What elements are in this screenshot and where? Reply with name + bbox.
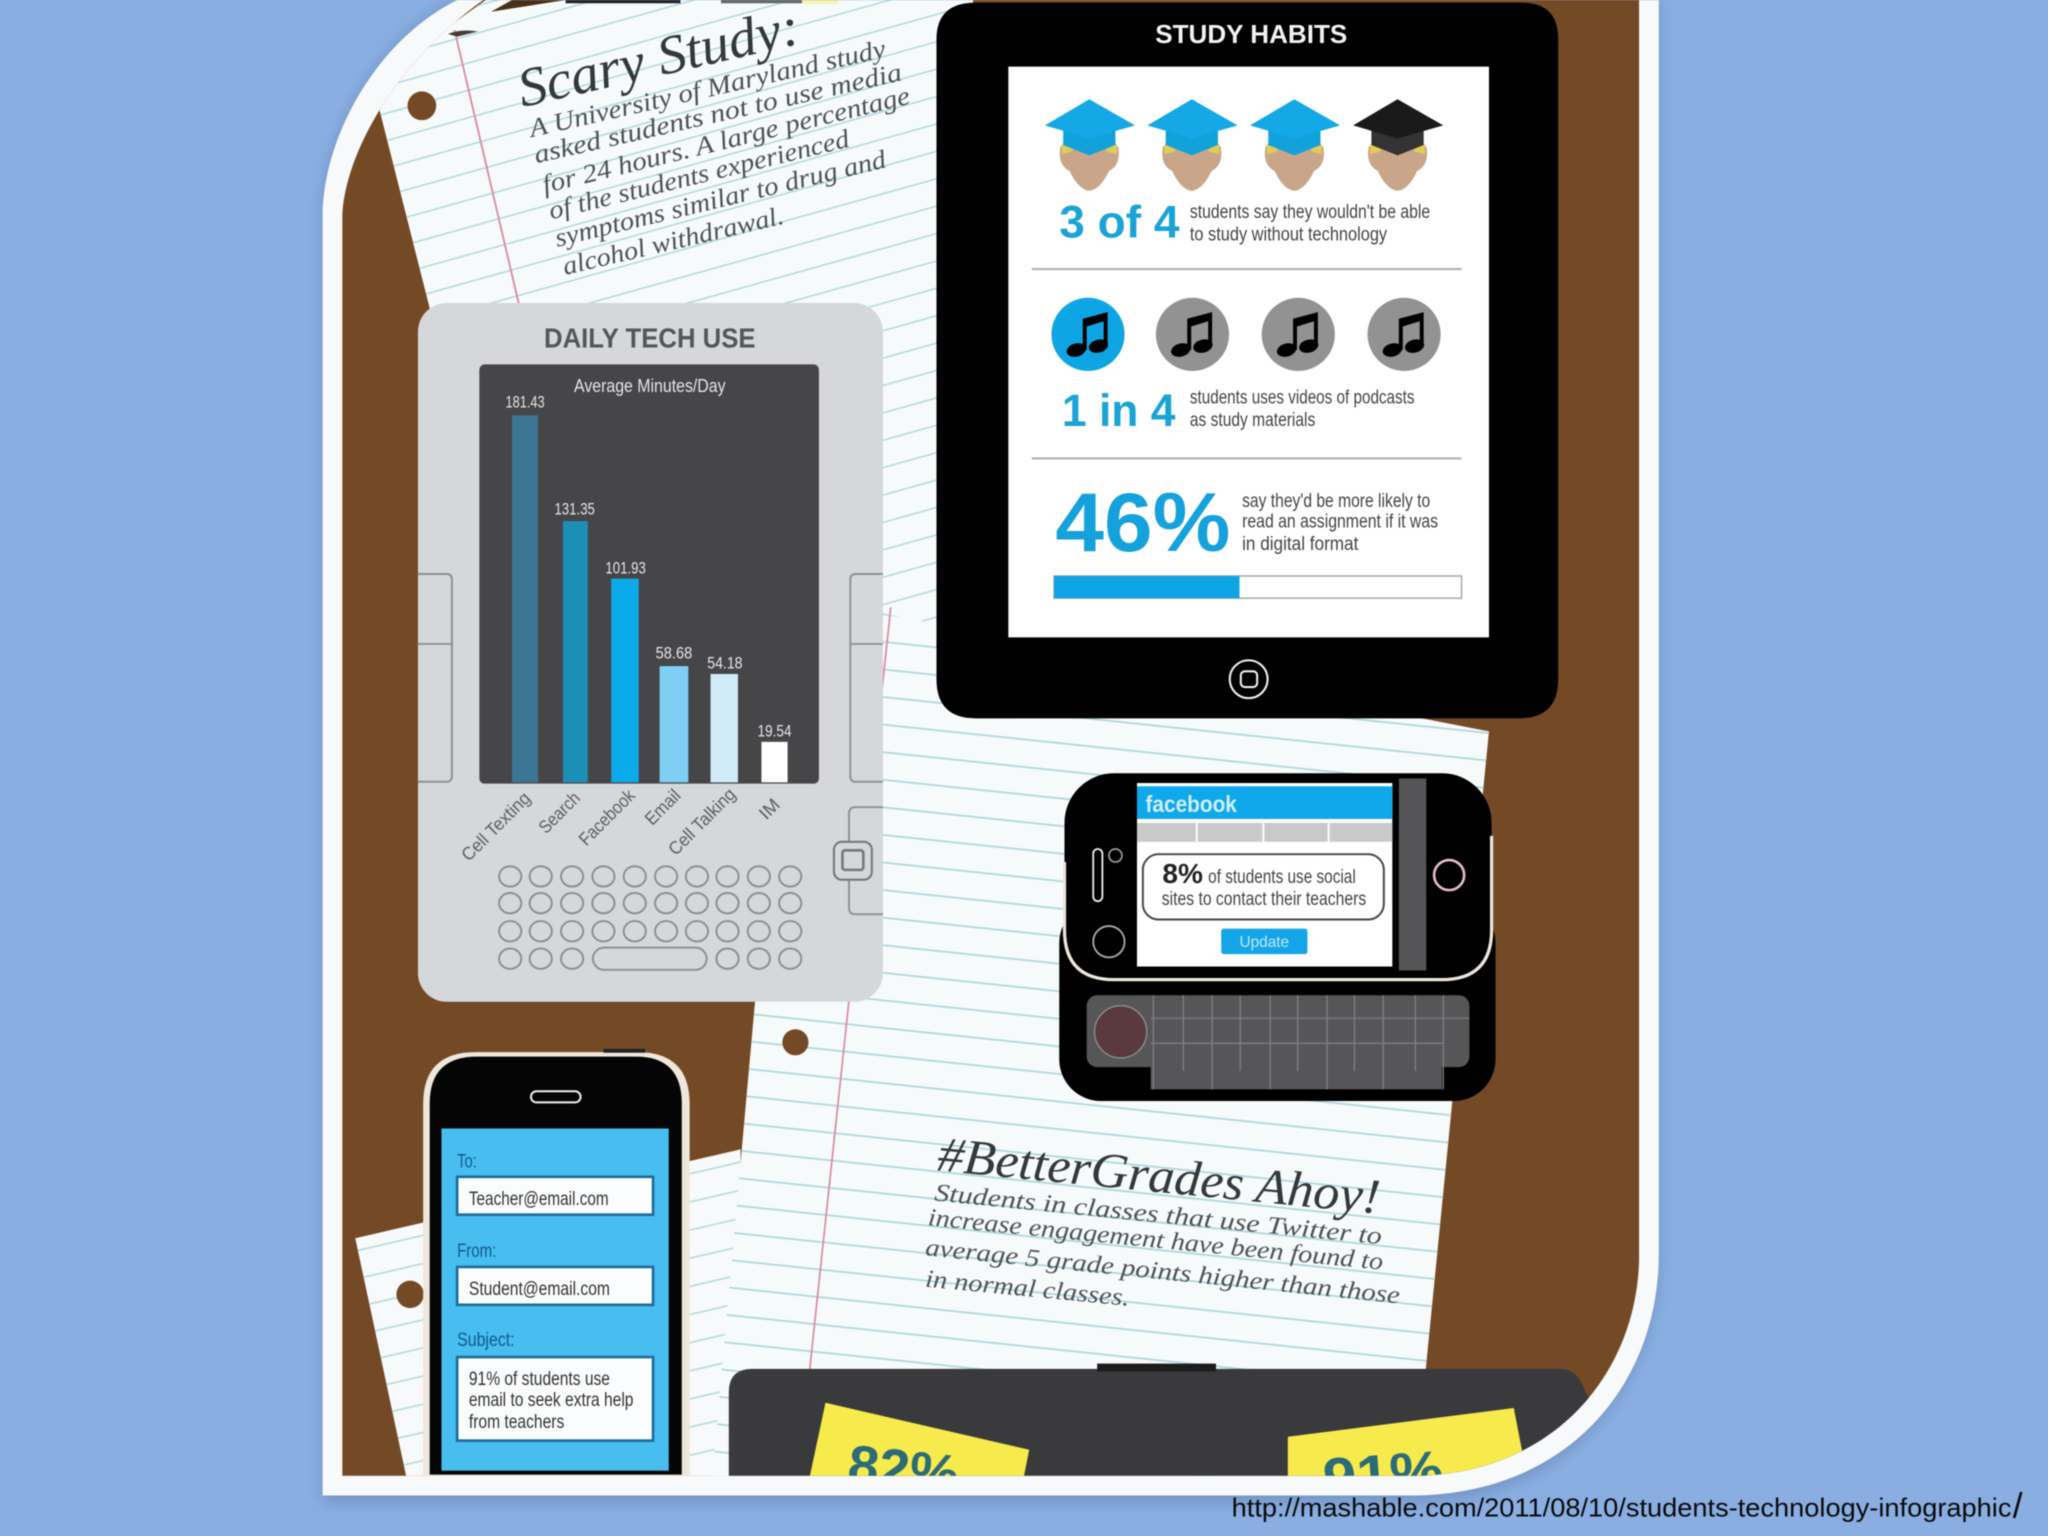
bars bbox=[512, 415, 788, 782]
category labels: IM bbox=[754, 794, 784, 823]
stat: 3 of 4: 3 of 4 bbox=[1059, 197, 1180, 248]
note text: average 5 grade points higher than those bbox=[924, 1234, 1401, 1309]
note text: A University of Maryland study bbox=[524, 34, 889, 143]
panel: bottom dark tablet bbox=[728, 1362, 1590, 1477]
paper hole bbox=[396, 1281, 424, 1308]
bar values: 19.54 bbox=[758, 723, 792, 741]
bar values: 101.93 bbox=[605, 559, 646, 577]
note text: of the students experienced bbox=[546, 124, 853, 225]
keyboard bbox=[499, 866, 801, 970]
heading: daily tech use: DAILY TECH USE bbox=[544, 322, 756, 353]
note text: asked students not to use media bbox=[531, 57, 904, 169]
tablet top button bbox=[1097, 1364, 1216, 1371]
note text bbox=[524, 34, 913, 281]
sticky note: 82% bbox=[809, 1402, 1030, 1476]
category labels: Cell Talking bbox=[664, 783, 739, 859]
stat: 3 of 4: to study without technology bbox=[1190, 224, 1388, 245]
category labels: Facebook bbox=[574, 784, 639, 849]
facebook tabs bbox=[1137, 823, 1392, 842]
icon: music note gray 1 bbox=[1156, 298, 1229, 371]
source url: http://mashable.com/2011/08/10/students-technology-infographic bbox=[1232, 1492, 2011, 1522]
tablet screen bbox=[1008, 67, 1489, 637]
bar values: 58.68 bbox=[656, 644, 692, 662]
field: subject: email to seek extra help bbox=[469, 1389, 634, 1411]
speech bubble: 8%: sites to contact their teachers bbox=[1162, 889, 1366, 910]
bar values: 181.43 bbox=[505, 394, 545, 412]
icon: graduate blue 3 bbox=[1250, 99, 1340, 191]
margin line bbox=[455, 30, 520, 308]
icon: graduate black bbox=[1353, 99, 1443, 191]
phone base bbox=[1059, 901, 1496, 1101]
heading: study habits: STUDY HABITS bbox=[1155, 19, 1347, 49]
field: subject: from teachers bbox=[469, 1411, 564, 1433]
category labels: Search bbox=[534, 787, 584, 837]
stat: 3 of 4: students say they wouldn't be able bbox=[1190, 202, 1430, 223]
speaker and camera bbox=[1093, 849, 1464, 957]
stat: 46%: in digital format bbox=[1242, 534, 1359, 555]
paper hole bbox=[408, 91, 436, 120]
speaker bbox=[531, 1091, 581, 1102]
field: from bbox=[457, 1240, 653, 1305]
field: from: From: bbox=[457, 1240, 496, 1262]
update button: Update bbox=[1240, 934, 1289, 951]
icon: music note blue bbox=[1051, 298, 1125, 371]
source url: / bbox=[2013, 1487, 2023, 1526]
panel: email phone bbox=[423, 1049, 690, 1482]
panel: study habits tablet bbox=[936, 3, 1558, 718]
category labels bbox=[457, 783, 784, 865]
note text: Students in classes that use Twitter to bbox=[933, 1179, 1383, 1250]
paper hole bbox=[782, 1029, 808, 1055]
phone screen bbox=[1137, 783, 1392, 967]
category labels: Cell Texting bbox=[457, 787, 534, 865]
panel: facebook slider phone bbox=[1059, 773, 1496, 1101]
update button bbox=[1221, 929, 1307, 954]
speech bubble: 8%: of students use social bbox=[1208, 867, 1356, 888]
top edge scraps of cropped devices bbox=[448, 0, 839, 37]
stat: 1 in 4: students uses videos of podcasts bbox=[1190, 388, 1415, 409]
bar values bbox=[505, 394, 792, 741]
white rounded frame bbox=[323, 0, 1659, 1496]
note text: for 24 hours. A large percentage bbox=[539, 81, 913, 199]
phone body bbox=[1064, 773, 1492, 980]
sticky note: 91% bbox=[1287, 1407, 1523, 1476]
stat: 1 in 4: as study materials bbox=[1190, 410, 1315, 431]
phone body outline bbox=[1064, 836, 1492, 980]
field: to bbox=[457, 1151, 653, 1215]
paper: better grades bbox=[712, 596, 1489, 1482]
stat: 3 of 4 bbox=[1059, 197, 1430, 248]
stat: 46%: say they'd be more likely to bbox=[1242, 491, 1430, 512]
icon: graduate blue 2 bbox=[1147, 99, 1238, 191]
field: from: Student@email.com bbox=[469, 1278, 610, 1300]
side buttons bbox=[418, 574, 883, 914]
speech bubble: 8% bbox=[1143, 854, 1384, 920]
phone top button bbox=[603, 1049, 645, 1053]
sticky note: 91%: 91% bbox=[1321, 1439, 1445, 1509]
sticky note: 82%: 82% bbox=[845, 1433, 962, 1506]
icon row: graduate heads bbox=[1045, 99, 1443, 191]
home button bbox=[834, 842, 872, 880]
icon row: music notes bbox=[1051, 298, 1441, 371]
stat: 1 in 4 bbox=[1062, 385, 1415, 436]
stat: 1 in 4: 1 in 4 bbox=[1062, 385, 1176, 436]
field: subject: 91% of students use bbox=[469, 1368, 610, 1390]
brown corkboard bbox=[333, 0, 1652, 1482]
note text bbox=[924, 1179, 1401, 1312]
note text: in normal classes. bbox=[924, 1266, 1131, 1312]
email screen bbox=[441, 1128, 669, 1471]
stat: 46%: 46% bbox=[1055, 475, 1230, 569]
paper: bottom left sheet bbox=[355, 1149, 741, 1482]
bar values: 131.35 bbox=[554, 501, 595, 519]
facebook header bbox=[1137, 786, 1392, 819]
field: to: To: bbox=[457, 1151, 477, 1173]
note text: alcohol withdrawal. bbox=[560, 201, 786, 281]
side bar bbox=[1399, 778, 1426, 970]
field: subject bbox=[457, 1329, 653, 1441]
bar values: 54.18 bbox=[707, 655, 743, 673]
stat: 46% bbox=[1055, 475, 1438, 569]
home button bbox=[1230, 660, 1268, 698]
facebook header: facebook bbox=[1145, 791, 1238, 817]
note text: increase engagement have been found to bbox=[927, 1204, 1384, 1276]
board contents bbox=[333, 0, 1652, 1509]
icon: music note gray 2 bbox=[1262, 298, 1335, 371]
field: to: Teacher@email.com bbox=[469, 1188, 609, 1210]
icon: music note gray 3 bbox=[1368, 298, 1441, 371]
margin line bbox=[810, 607, 891, 1369]
keyboard bbox=[1087, 995, 1469, 1089]
note text: symptoms similar to drug and bbox=[552, 144, 890, 253]
bar chart: average minutes per day bbox=[479, 364, 819, 784]
progress bar bbox=[1054, 576, 1462, 598]
stat: 46%: read an assignment if it was bbox=[1242, 512, 1438, 533]
heading: better grades: #BetterGrades Ahoy! bbox=[935, 1126, 1383, 1225]
speech bubble: 8%: 8% bbox=[1162, 858, 1203, 889]
paper: scary study bbox=[377, 0, 973, 627]
frame shadow bbox=[323, 0, 1659, 1502]
panel: daily tech use e-reader bbox=[418, 303, 883, 1002]
category labels: Email bbox=[640, 785, 685, 829]
icon: graduate blue 1 bbox=[1045, 99, 1135, 191]
field: subject: Subject: bbox=[457, 1329, 515, 1351]
heading: scary study: Scary Study: bbox=[512, 0, 805, 119]
chart title: Average Minutes/Day bbox=[574, 375, 726, 396]
